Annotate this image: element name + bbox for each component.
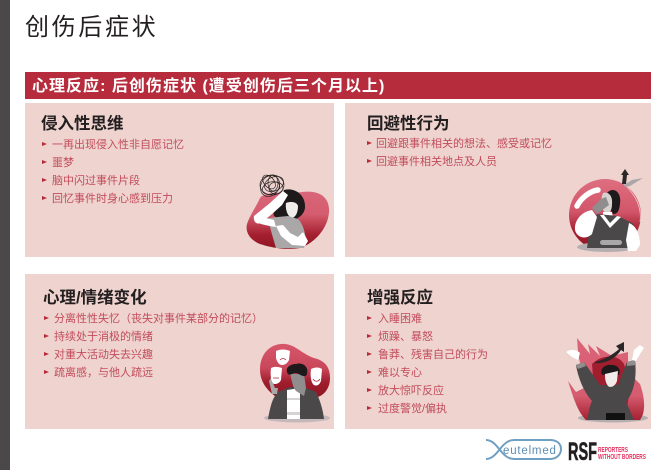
list: hyperarousal: 烦躁、暴怒 (378, 331, 433, 343)
logo: eutelmed (486, 440, 561, 459)
illustration: woman with tangled thoughts (247, 172, 329, 249)
heading: avoidance: 回避性行为 (367, 115, 450, 133)
list: avoidance: 回避事件相关地点及人员 (376, 156, 497, 168)
list: mood changes: 对重大活动失去兴趣 (54, 349, 153, 361)
illustration: man in flames with arrow (566, 338, 648, 422)
panel: intrusive thoughts (25, 103, 334, 257)
illustration: man covering his face (569, 169, 643, 252)
hoodie (576, 360, 636, 420)
heading: intrusive thoughts: 侵入性思维 (41, 115, 124, 133)
side strip (0, 0, 10, 470)
list: intrusive thoughts: 脑中闪过事件片段 (52, 175, 140, 187)
list: mood changes: 疏离感，与他人疏远 (54, 367, 153, 379)
heading: mood changes: 心理/情绪变化 (43, 289, 147, 307)
list: hyperarousal: 入睡困难 (378, 313, 422, 325)
list: intrusive thoughts (42, 138, 184, 205)
logo: eutelmed: eutelmed (503, 445, 557, 457)
list: hyperarousal: 难以专心 (378, 367, 422, 379)
list: mood changes (44, 312, 263, 379)
illustration: man with masks (260, 344, 330, 422)
list: hyperarousal: 鲁莽、残害自己的行为 (378, 349, 488, 361)
panel: hyperarousal (345, 274, 651, 429)
logo: RSF: RSF (568, 438, 597, 466)
list: hyperarousal: 过度警觉/偏执 (378, 403, 447, 415)
banner text: 心理反应: 后创伤症状 (遭受创伤后三个月以上) (32, 78, 385, 95)
panel: mood changes (25, 274, 334, 429)
list: intrusive thoughts: 噩梦 (52, 157, 74, 169)
panel: avoidance (345, 103, 651, 257)
logo: RSF (568, 438, 646, 466)
heading: hyperarousal: 增强反应 (367, 289, 433, 307)
list: mood changes: 持续处于消极的情绪 (54, 331, 153, 343)
title: 创伤后症状 (25, 14, 158, 41)
masks (276, 350, 290, 365)
list: intrusive thoughts: 一再出现侵入性非自愿记忆 (52, 139, 184, 151)
list: hyperarousal (367, 312, 488, 415)
list: intrusive thoughts: 回忆事件时身心感到压力 (52, 193, 173, 205)
logo: RSF: REPORTERS (598, 447, 628, 454)
list: hyperarousal: 放大惊吓反应 (378, 385, 444, 397)
list: avoidance (367, 138, 552, 168)
list: mood changes: 分离性性失忆（丧失对事件某部分的记忆） (54, 313, 263, 325)
list: avoidance: 回避跟事件相关的想法、感受或记忆 (376, 138, 552, 150)
banner (25, 72, 651, 99)
